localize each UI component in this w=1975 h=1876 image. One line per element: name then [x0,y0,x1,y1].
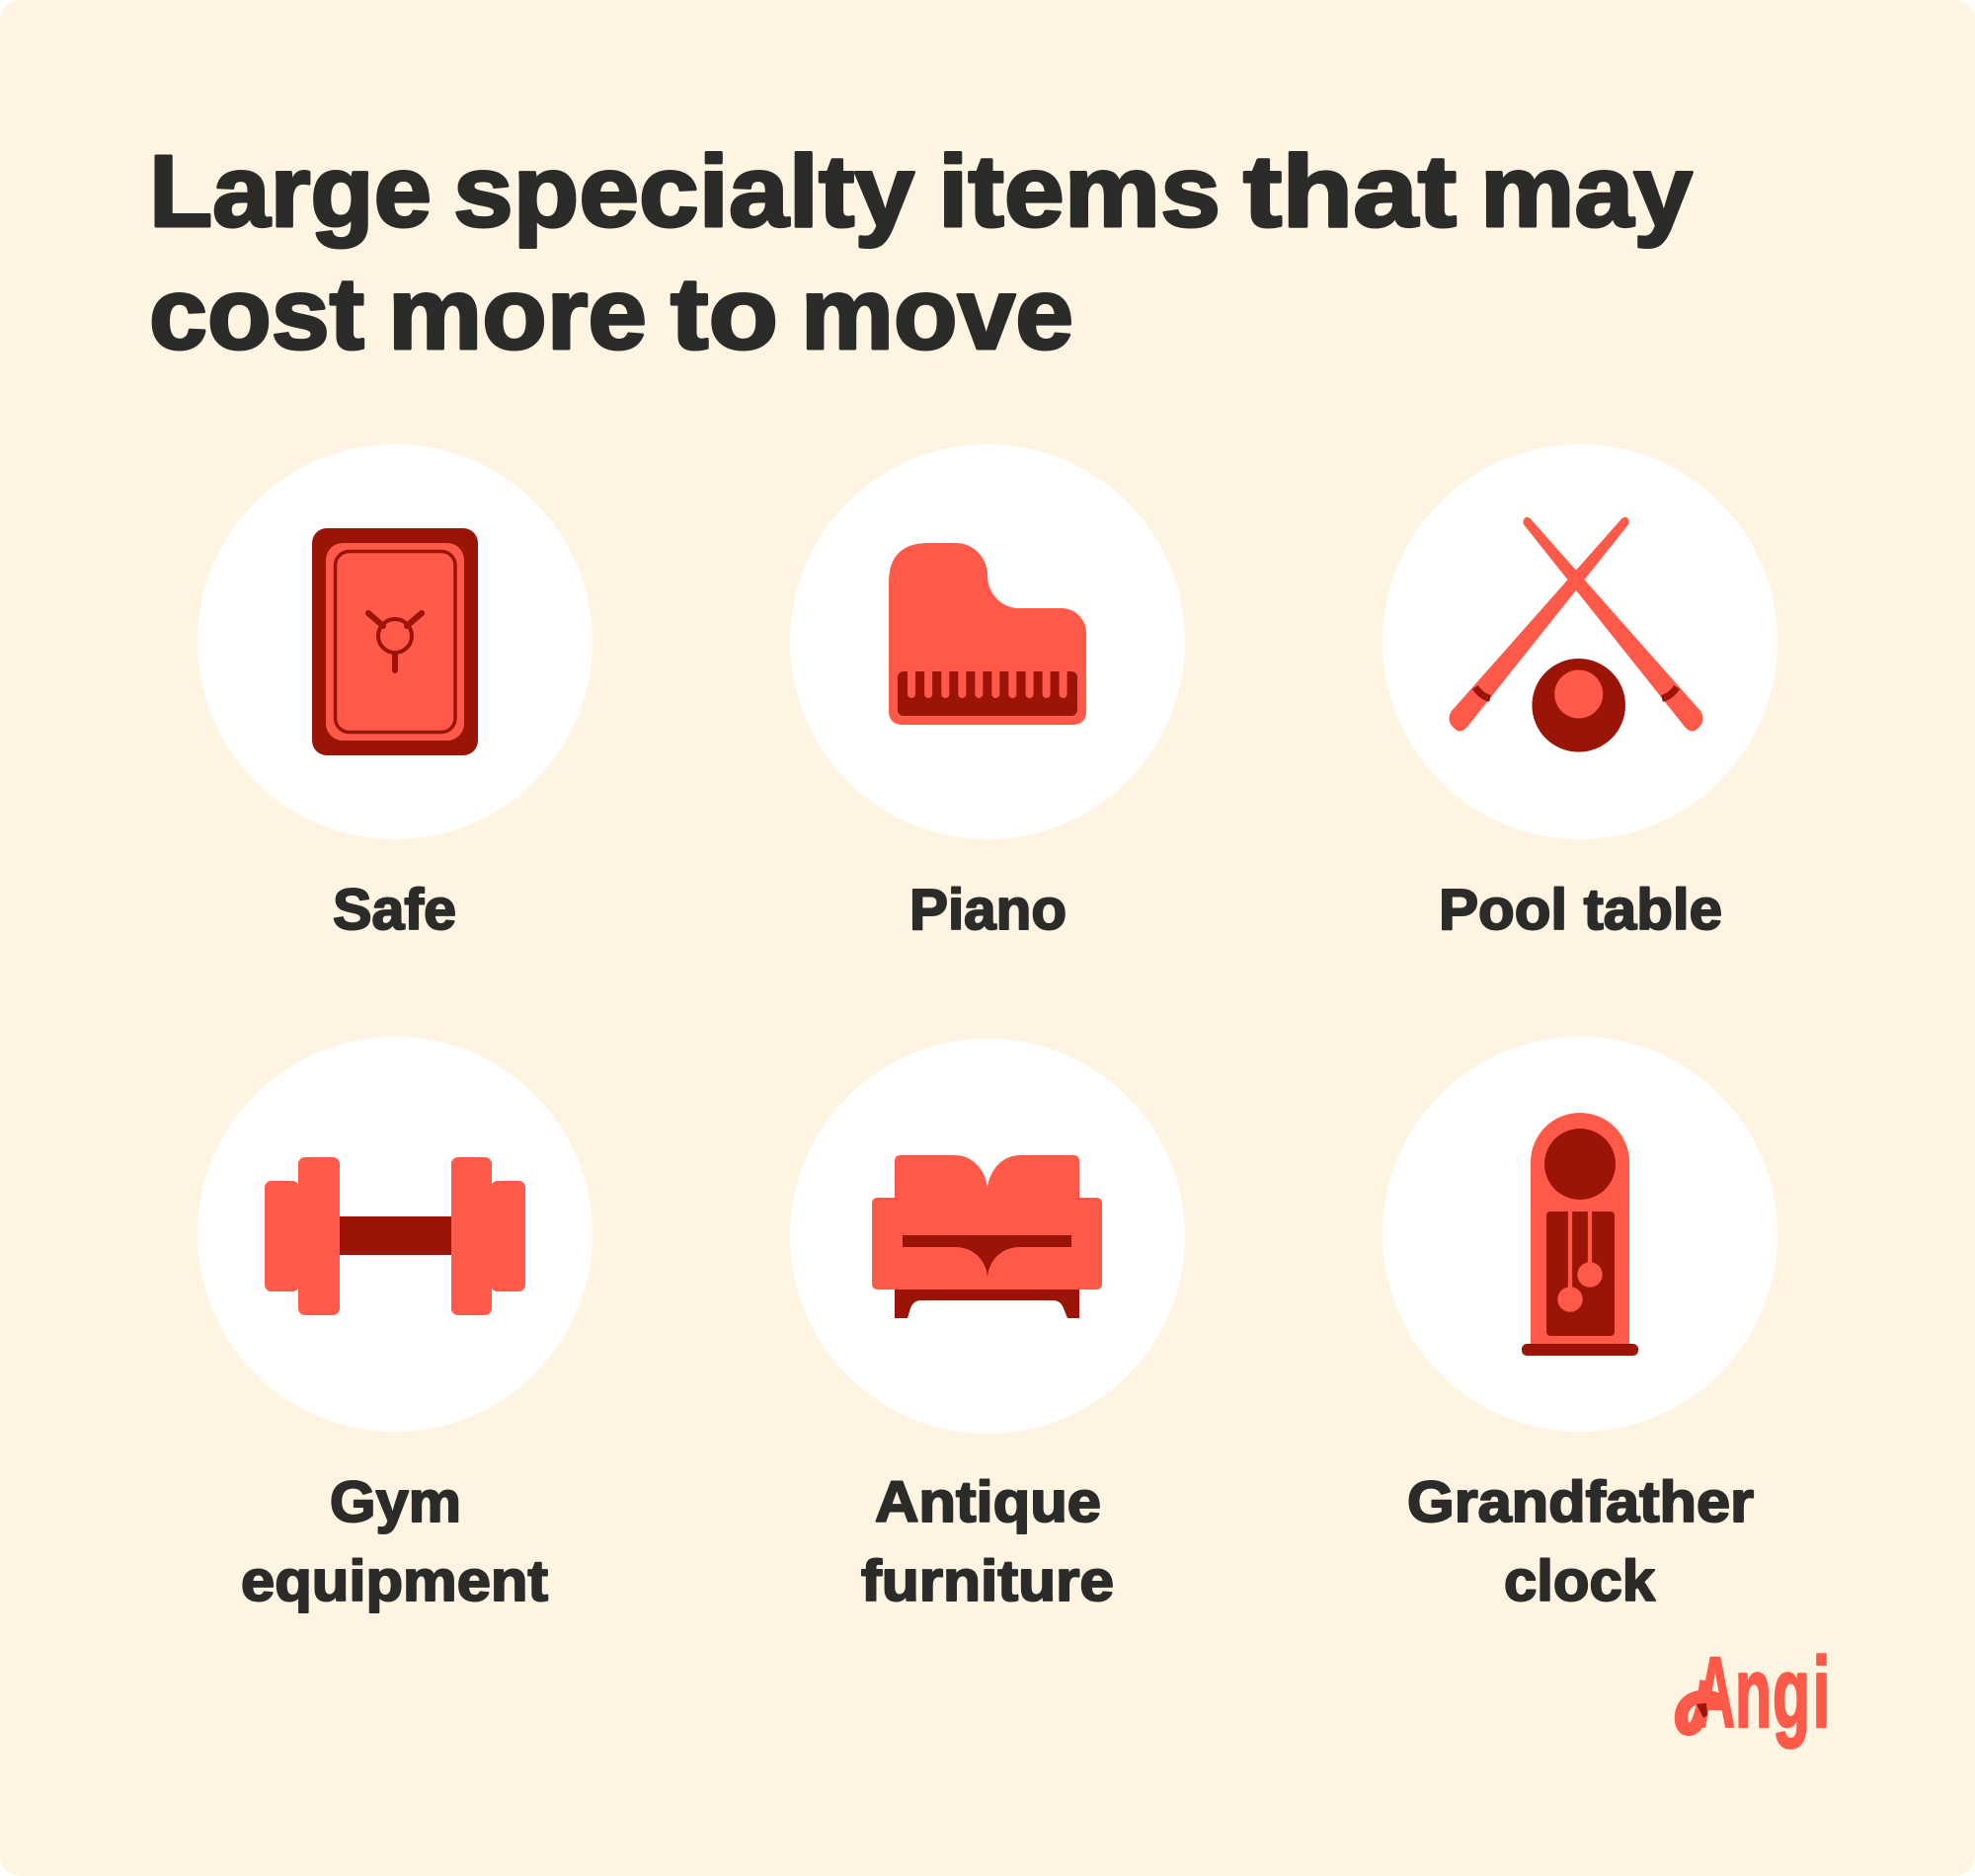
logo: Angi: g [1773,1638,1810,1749]
title: move [801,257,1073,370]
label: safe: Safe [333,878,456,942]
title: that [1243,134,1457,248]
logo: Angi: n [1735,1638,1772,1749]
label: grandfather clock: Grandfather [1407,1470,1754,1534]
title: items [938,134,1221,248]
label: gym equipment: equipment [241,1549,548,1613]
label: antique furniture: furniture [861,1549,1114,1613]
icon: piano [889,543,1086,725]
panel: piano [790,444,1185,942]
logo: Angi: A [1696,1638,1735,1749]
title [149,134,1693,370]
title: more [388,257,647,370]
title: specialty [453,134,914,248]
label: gym equipment [241,1470,548,1613]
label: pool table: Pool table [1439,878,1722,942]
panel: pool table [1382,444,1778,942]
label: gym equipment: Gym [330,1470,461,1534]
label: grandfather clock [1407,1470,1754,1613]
title: may [1480,134,1693,248]
label: antique furniture [861,1470,1114,1613]
label: piano: Piano [909,878,1066,942]
icon: pool cues and ball [1450,517,1702,752]
title: cost [149,257,364,370]
title: to [671,257,778,370]
logo: Angi [1681,1638,1831,1749]
panel: antique furniture [790,1039,1185,1613]
logo: Angi: i [1813,1638,1831,1749]
title: Large [149,134,432,248]
icon: antique sofa [872,1155,1102,1318]
label: antique furniture: Antique [875,1470,1101,1534]
icon: grandfather clock [1522,1113,1638,1356]
panel: safe [198,444,592,942]
icon: safe [312,528,478,755]
panel: gym equipment [198,1037,592,1613]
label: grandfather clock: clock [1504,1549,1656,1613]
panel: grandfather clock [1382,1037,1778,1613]
icon: dumbbell [265,1157,525,1315]
